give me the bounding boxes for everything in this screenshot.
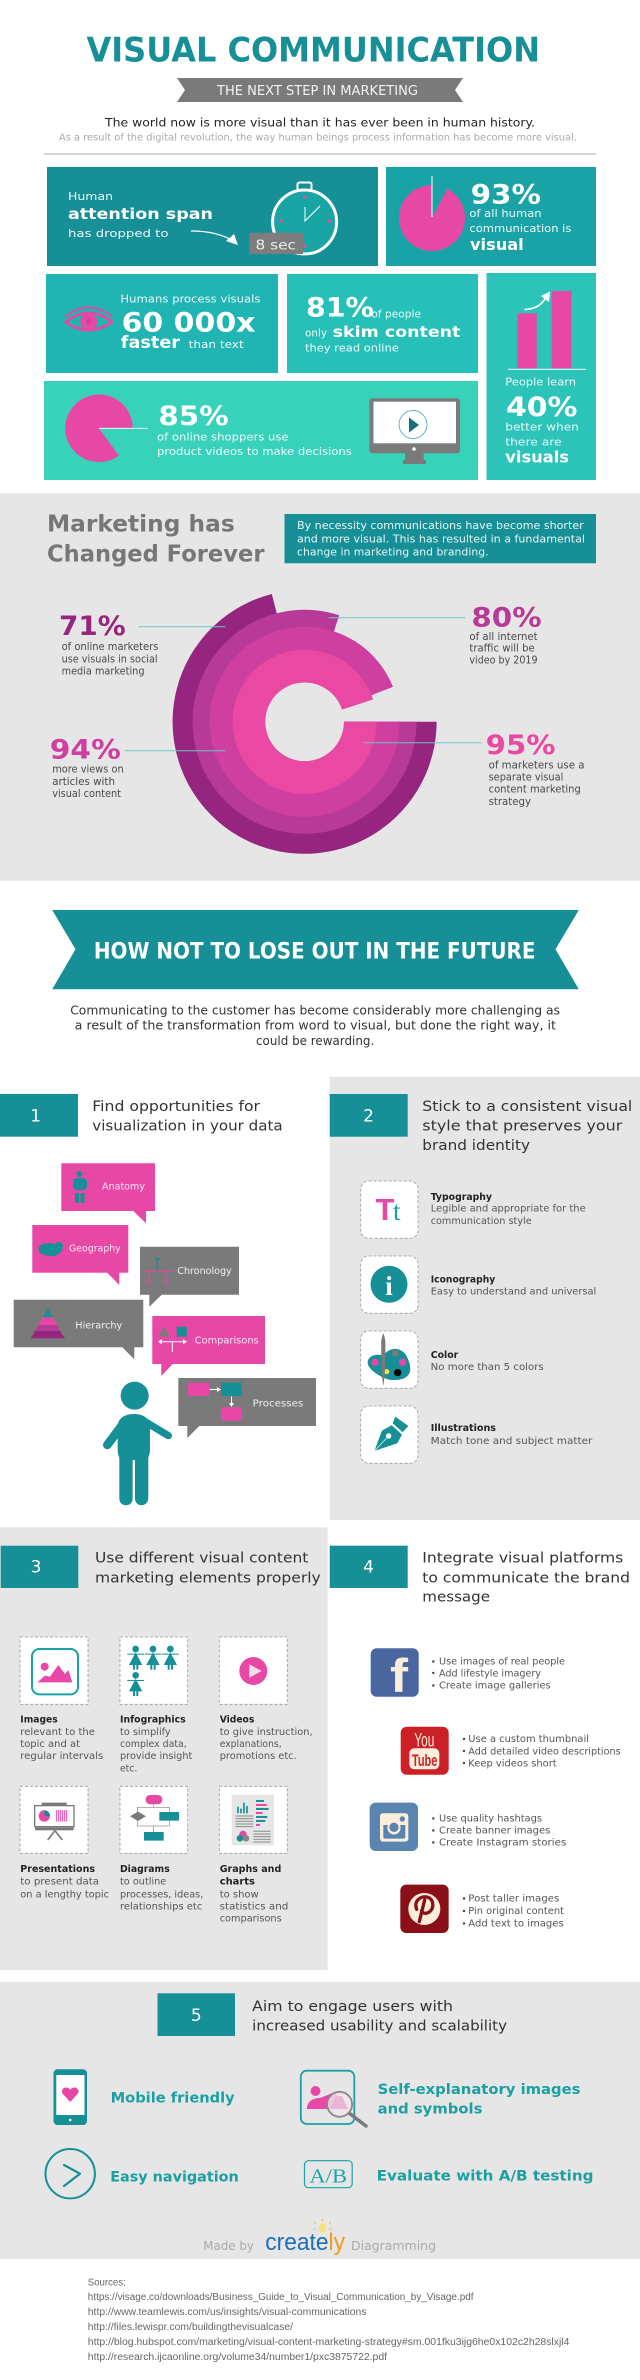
heading 4: to communicate the brand	[422, 1570, 630, 1586]
item: iconography: Easy to understand and universal	[431, 1286, 596, 1297]
panel: 93 percent: 93%	[471, 179, 541, 210]
item: youtube: Keep videos short	[468, 1758, 557, 1769]
panel: 60000x faster: 60 000x	[122, 308, 255, 339]
panel: 40 percent: visuals	[505, 448, 569, 467]
speech bubble: hierarchy	[14, 1300, 143, 1359]
item: infographics	[120, 1637, 192, 1775]
panel 4: visual platforms	[330, 1546, 630, 1933]
item: facebook	[371, 1648, 565, 1702]
step number 2: 2	[363, 1106, 374, 1126]
heading 4: Integrate visual platforms	[422, 1551, 623, 1567]
icon: phone	[54, 2069, 87, 2125]
stat: 94 percent: visual content	[52, 788, 121, 800]
sources	[88, 2278, 570, 2363]
stat: 80 percent	[329, 603, 542, 667]
made by creately logo	[203, 2219, 436, 2256]
panel 2: consistent visual style	[330, 1077, 640, 1520]
panel: 60000x faster	[46, 274, 278, 373]
heading 3: Use different visual content	[95, 1551, 309, 1567]
item: color: No more than 5 colors	[431, 1362, 544, 1373]
sources: http://blog.hubspot.com/marketing/visual-content-marketing-strategy#sm.001fku3ijg6he0x102c2h28slxjl4	[88, 2337, 570, 2348]
item: typography: T	[376, 1192, 394, 1227]
panel: 60000x faster: faster	[121, 333, 181, 353]
item: instagram: Create Instagram stories	[439, 1838, 566, 1849]
icon: instagram	[370, 1803, 418, 1851]
panel: attention span	[47, 167, 378, 266]
panel: 40 percent: People learn	[505, 376, 576, 389]
ribbon heading: how not to lose out	[52, 910, 579, 989]
item: videos: Videos	[220, 1715, 254, 1726]
bar chart	[508, 291, 586, 370]
item: self-explanatory images	[301, 2071, 580, 2126]
pie chart 93%	[399, 176, 465, 251]
stat: 95 percent: content marketing	[489, 784, 581, 796]
radial donut chart	[173, 594, 437, 854]
stat: 95 percent: 95%	[486, 730, 556, 761]
sources: http://www.teamlewis.com/us/insights/visual-communications	[88, 2307, 367, 2318]
panel 5: usability and scalability	[0, 1982, 640, 2259]
intro text: The world now is more visual than it has ever been in human history.	[104, 116, 535, 130]
icon: facebook: f	[390, 1649, 408, 1702]
item: videos: to give instruction,	[220, 1727, 313, 1738]
item: presentations	[20, 1786, 109, 1900]
item: videos: promotions etc.	[220, 1751, 297, 1762]
title: VISUAL COMMUNICATION	[86, 31, 540, 71]
item: youtube	[401, 1727, 621, 1775]
item: illustrations: Illustrations	[431, 1423, 496, 1434]
icon: A/B	[304, 2161, 352, 2188]
item: typography: t	[393, 1196, 401, 1226]
step number 4: 4	[363, 1558, 374, 1578]
stat: 71 percent: media marketing	[62, 665, 144, 677]
icon: youtube	[401, 1727, 449, 1775]
panel: 93 percent: of all human	[469, 207, 542, 220]
panel: attention span: Human	[68, 190, 113, 203]
stat: 71 percent: 71%	[59, 611, 126, 642]
icon: navigation chevron	[45, 2149, 95, 2198]
speech bubble: anatomy: Anatomy	[102, 1181, 145, 1192]
item: graphs and charts: to show	[220, 1889, 259, 1900]
panel 3: visual content elements	[0, 1527, 328, 1970]
item: infographics: complex data,	[120, 1739, 187, 1750]
sources: Sources:	[88, 2278, 126, 2289]
heading 3: marketing elements properly	[95, 1570, 321, 1586]
item: illustrations: Match tone and subject matter	[431, 1436, 593, 1447]
item: typography: Typography	[431, 1192, 492, 1203]
stat: 95 percent	[363, 730, 584, 808]
speech bubble: comparisons	[152, 1316, 265, 1376]
heading 2	[422, 1099, 632, 1154]
icon: A/B: A/B	[309, 2165, 347, 2187]
made by creately logo: Made by	[203, 2238, 254, 2253]
item: iconography	[361, 1256, 596, 1313]
speech bubble: hierarchy: Hierarchy	[75, 1321, 123, 1332]
item: color: Color	[431, 1350, 458, 1361]
item: A/B testing: Evaluate with A/B testing	[377, 2169, 594, 2185]
speech bubble: anatomy	[61, 1163, 155, 1223]
speech bubble: processes: Processes	[253, 1399, 303, 1410]
item: instagram: Use quality hashtags	[439, 1814, 542, 1825]
panel: 81 percent	[287, 274, 478, 373]
item: facebook: Add lifestyle imagery	[439, 1669, 541, 1680]
item: images	[20, 1637, 103, 1762]
icon: bulb	[313, 2219, 332, 2233]
intro text	[59, 116, 577, 144]
item: typography: Legible and appropriate for the	[431, 1204, 586, 1215]
stat: 95 percent: separate visual	[489, 772, 563, 784]
panel: 93 percent: visual	[470, 235, 524, 254]
panel: 81 percent: of people	[371, 308, 421, 321]
panel: 85 percent	[44, 381, 478, 480]
step number 1: 1	[30, 1106, 41, 1126]
item: images: topic and at	[20, 1739, 80, 1750]
item: diagrams: to outline	[120, 1877, 166, 1888]
item: iconography: Iconography	[431, 1274, 496, 1285]
item: diagrams: relationships etc	[120, 1901, 202, 1912]
item: youtube: Use a custom thumbnail	[468, 1734, 589, 1745]
item: diagrams	[120, 1786, 203, 1912]
icon: pinterest	[400, 1885, 449, 1933]
step number 5: 5	[191, 2006, 202, 2026]
item: infographics: etc.	[120, 1764, 137, 1775]
item: easy navigation	[45, 2149, 239, 2198]
item: A/B testing	[304, 2161, 594, 2188]
icon: youtube: Tube	[412, 1751, 437, 1770]
item: diagrams: processes, ideas,	[120, 1889, 203, 1900]
panel: 40 percent: there are	[505, 436, 562, 449]
stat: 71 percent: of online marketers	[62, 641, 158, 653]
ribbon heading: how not to lose out: HOW NOT TO LOSE OUT IN THE FUTURE	[94, 939, 536, 964]
speech bubble: chronology	[140, 1247, 239, 1307]
item: typography	[361, 1181, 586, 1238]
intro text: As a result of the digital revolution, the way human beings process information has become more visual.	[59, 133, 577, 144]
panel: 40 percent: 40%	[506, 392, 578, 423]
heading 1: Find opportunities for	[92, 1099, 260, 1115]
icon: person	[107, 1382, 168, 1505]
item: graphs and charts: comparisons	[220, 1914, 282, 1925]
callout: change in marketing and branding.	[297, 547, 489, 559]
item: self-explanatory images: and symbols	[378, 2101, 482, 2117]
arrow	[191, 231, 238, 245]
item: videos	[219, 1637, 313, 1762]
heading: Changed Forever	[47, 542, 265, 568]
step number 3: 3	[31, 1558, 41, 1578]
item: diagrams: Diagrams	[120, 1864, 170, 1875]
intro paragraph	[70, 1002, 560, 1048]
icon: facebook	[371, 1648, 419, 1702]
icon: image under magnifier	[301, 2071, 366, 2126]
heading 1	[92, 1099, 283, 1135]
item: facebook: Use images of real people	[439, 1656, 565, 1667]
panel: 85 percent: of online shoppers use	[157, 431, 289, 444]
stat: 71 percent: use visuals in social	[62, 653, 158, 665]
item: presentations: to present data	[20, 1877, 99, 1888]
item: graphs and charts	[219, 1786, 288, 1925]
item: presentations: on a lengthy topic	[20, 1889, 109, 1900]
heading 2: Stick to a consistent visual	[422, 1099, 632, 1115]
heading 2: style that preserves your	[422, 1119, 622, 1135]
item: mobile friendly	[54, 2069, 235, 2125]
item: iconography: i	[385, 1271, 393, 1301]
item: youtube: Add detailed video descriptions	[468, 1746, 621, 1757]
intro paragraph: could be rewarding.	[256, 1033, 374, 1048]
item: presentations: Presentations	[20, 1864, 95, 1875]
item: images: Images	[20, 1715, 58, 1726]
panel: 40 percent: better when	[505, 421, 579, 434]
stat: 80 percent: 80%	[471, 603, 542, 634]
made by creately logo: Diagramming	[351, 2238, 436, 2253]
panel: 81 percent: 81%	[306, 293, 374, 324]
stat: 80 percent: of all internet	[469, 631, 538, 643]
item: infographics: provide insight	[120, 1751, 192, 1762]
speech bubble: chronology: Chronology	[177, 1266, 232, 1277]
step number 1	[0, 1094, 78, 1137]
item: infographics: Infographics	[120, 1715, 186, 1726]
intro paragraph: a result of the transformation from word to visual, but done the right way, it	[75, 1017, 556, 1032]
heading 4	[422, 1551, 630, 1606]
subtitle ribbon: THE NEXT STEP IN MARKETING	[216, 83, 418, 99]
item: self-explanatory images: Self-explanatory images	[378, 2082, 580, 2098]
heading 3	[95, 1551, 321, 1586]
item: instagram	[370, 1803, 566, 1851]
callout: By necessity communications have become shorter	[297, 520, 584, 532]
sources: http://research.ijcaonline.org/volume34/number1/pxc3875722.pdf	[88, 2352, 387, 2363]
subtitle ribbon	[177, 78, 463, 102]
panel: 81 percent: skim content	[333, 323, 461, 341]
icon: monitor with play button	[369, 398, 460, 464]
step number 4	[330, 1546, 408, 1588]
sources: http://files.lewispr.com/buildingthevisualcase/	[88, 2322, 293, 2333]
heading 4: message	[422, 1590, 490, 1606]
item: images: relevant to the	[20, 1727, 95, 1738]
icon: eye	[65, 307, 112, 330]
icon: youtube: You	[414, 1731, 434, 1752]
item: videos: explanations,	[220, 1739, 282, 1750]
panel: 60000x faster: Humans process visuals	[120, 293, 261, 306]
heading	[47, 512, 265, 568]
panel: 81 percent: they read online	[305, 342, 399, 355]
item: typography: communication style	[431, 1216, 532, 1227]
panel: 85 percent: product videos to make decisions	[157, 445, 352, 458]
heading 5	[252, 1999, 507, 2035]
step number 2	[330, 1094, 408, 1137]
panel: 60000x faster: than text	[189, 338, 244, 351]
stat: 94 percent: 94%	[50, 735, 121, 766]
item: easy navigation: Easy navigation	[110, 2170, 239, 2186]
item: pinterest: Add text to images	[468, 1919, 564, 1930]
sources: https://visage.co/downloads/Business_Guide_to_Visual_Communication_by_Visage.pdf	[88, 2292, 474, 2303]
stat: 80 percent: traffic will be	[469, 643, 535, 655]
speech bubble: processes	[178, 1378, 316, 1438]
panel: 85 percent: 85%	[158, 401, 229, 432]
speech bubble: geography	[32, 1225, 128, 1285]
intro paragraph: Communicating to the customer has become considerably more challenging as	[70, 1002, 560, 1017]
item: infographics: to simplify	[120, 1727, 171, 1738]
item: pinterest	[400, 1885, 564, 1933]
speech bubble: geography: Geography	[69, 1244, 121, 1255]
item: mobile friendly: Mobile friendly	[111, 2091, 235, 2107]
item: instagram: Create banner images	[439, 1826, 550, 1837]
icon: stopwatch	[273, 182, 337, 254]
item: facebook: Create image galleries	[439, 1681, 551, 1692]
step number 5	[158, 1993, 235, 2036]
panel: 93 percent	[386, 167, 596, 266]
callout	[284, 514, 596, 563]
step number 3	[1, 1546, 78, 1588]
panel: 40 percent	[486, 273, 596, 480]
panel: attention span: has dropped to	[68, 227, 169, 240]
heading 1: visualization in your data	[92, 1119, 283, 1135]
item: color	[361, 1331, 544, 1388]
stat: 80 percent: video by 2019	[469, 655, 538, 667]
stat: 94 percent: more views on	[52, 764, 124, 776]
callout: and more visual. This has resulted in a fundamental	[297, 533, 585, 545]
speech bubble: comparisons: Comparisons	[195, 1335, 259, 1346]
item: graphs and charts: charts	[220, 1876, 255, 1887]
heading 5: Aim to engage users with	[252, 1999, 453, 2015]
8 sec label: 8 sec	[256, 238, 296, 253]
stat: 94 percent: articles with	[52, 776, 115, 788]
item: images: regular intervals	[20, 1751, 103, 1762]
panel: attention span: attention span	[68, 205, 213, 223]
made by creately logo: creately	[265, 2229, 345, 2256]
heading: Marketing has	[47, 512, 235, 538]
item: graphs and charts: statistics and	[220, 1901, 288, 1912]
stat: 94 percent	[50, 735, 225, 800]
heading 5: increased usability and scalability	[252, 2019, 507, 2035]
stat: 71 percent	[59, 611, 225, 677]
heading 2: brand identity	[422, 1138, 530, 1154]
stat: 95 percent: of marketers use a	[489, 759, 584, 771]
item: graphs and charts: Graphs and	[220, 1864, 281, 1875]
8 sec label	[250, 233, 303, 254]
item: pinterest: Post taller images	[468, 1894, 559, 1905]
stat: 95 percent: strategy	[489, 796, 531, 808]
panel: 93 percent: communication is	[469, 222, 572, 235]
item: illustrations	[361, 1406, 593, 1463]
panel: marketing has changed forever	[0, 493, 640, 881]
panel: 81 percent: only	[305, 327, 327, 340]
item: pinterest: Pin original content	[468, 1906, 564, 1917]
pie chart 85%	[65, 394, 148, 462]
panel 1: find opportunities	[0, 1094, 316, 1505]
